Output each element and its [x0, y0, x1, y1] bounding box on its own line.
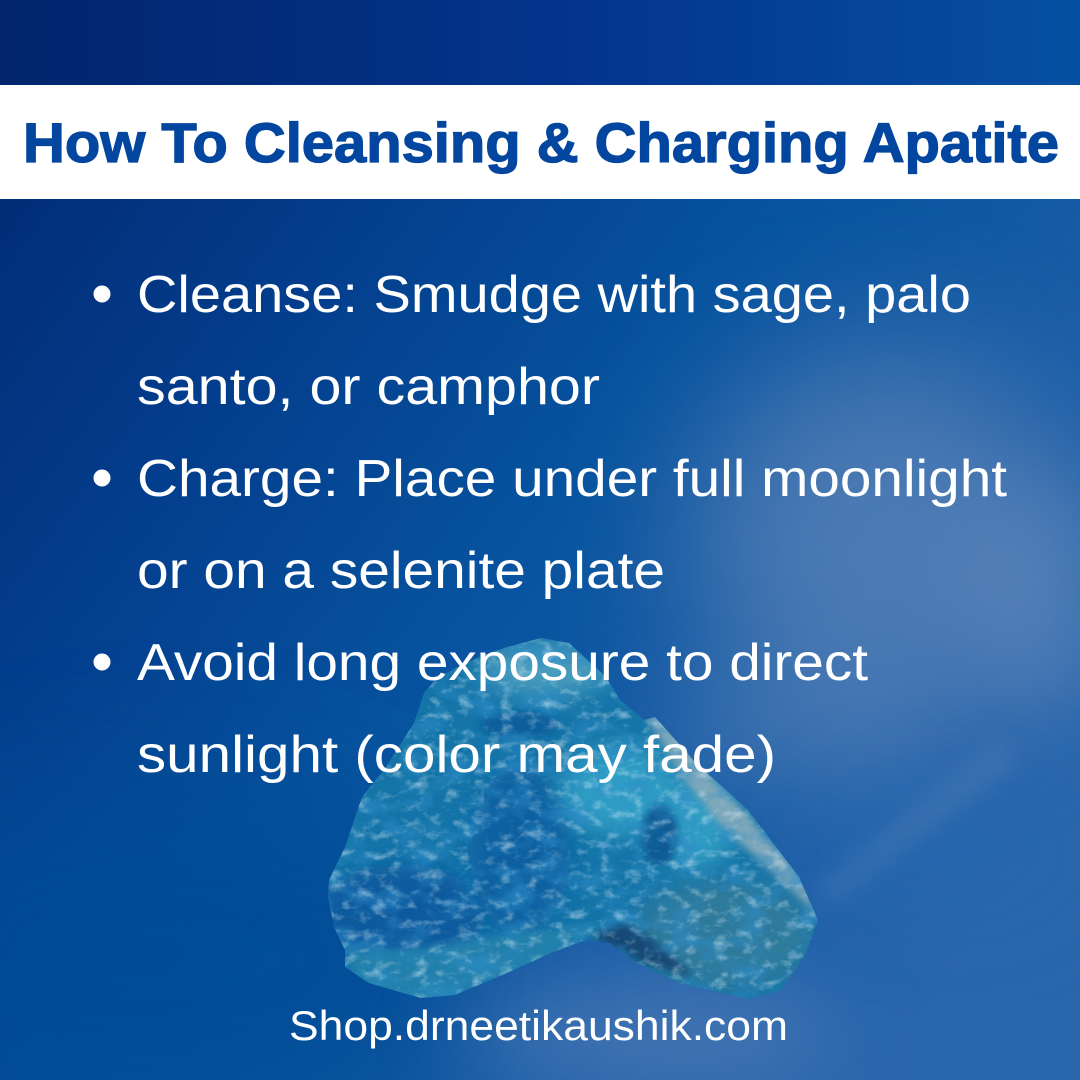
bullet: avoid: sunlight (color may fade): [137, 726, 776, 784]
bullet: charge: Charge: Place under full moonlight: [137, 450, 1008, 508]
title: How To Cleansing & Charging Apatite: [23, 111, 1059, 174]
bullet: avoid: [94, 634, 869, 784]
apatite rock image: [315, 630, 830, 1010]
title banner: [0, 85, 1080, 199]
bullet: charge: [94, 450, 1008, 600]
bullet: charge: or on a selenite plate: [137, 542, 665, 600]
bullet: cleanse: Cleanse: Smudge with sage, palo: [137, 266, 971, 324]
bullet: avoid: Avoid long exposure to direct: [137, 634, 869, 692]
footer url: Shop.drneetikaushik.com: [289, 1002, 788, 1049]
bullet: cleanse: santo, or camphor: [137, 358, 600, 416]
bullet: cleanse: [94, 266, 971, 416]
bullet list: [94, 266, 1008, 784]
